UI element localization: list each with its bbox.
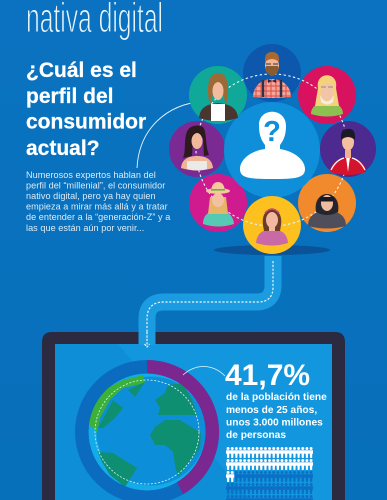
- statistic description: de la población tiene: [226, 392, 327, 403]
- greenland: [128, 382, 145, 397]
- unknown silhouette: [240, 112, 305, 179]
- heading: actual?: [26, 137, 100, 160]
- heading: ¿Cuál es el: [26, 59, 137, 82]
- africa: [150, 420, 201, 477]
- persona: blonde man in green: [311, 75, 343, 116]
- dashed arrow end: [144, 332, 150, 347]
- dashed ring: [196, 74, 348, 226]
- statistic description: de personas: [226, 430, 286, 441]
- monitor: [42, 332, 345, 500]
- question mark: ?: [263, 116, 281, 148]
- screen highlight: [118, 344, 332, 500]
- statistic: 41,7%: 41,7%: [225, 359, 310, 392]
- pipe from persona wheel to monitor: [147, 256, 273, 346]
- intro text block: las que están aún por venir...: [26, 223, 144, 233]
- europe: [155, 383, 197, 415]
- pictogram of people: [226, 447, 313, 500]
- persona: bearded man in plaid shirt: [253, 52, 291, 98]
- yellow disc: [243, 196, 301, 254]
- highlighted people: [226, 447, 313, 483]
- persona: man with long hair in leather jacket: [199, 73, 238, 121]
- pipe end over monitor: [138, 332, 156, 347]
- persona: woman with long dark hair: [181, 126, 213, 170]
- dashed globe ring: [95, 380, 199, 484]
- center disc: [224, 102, 320, 198]
- intro text block: nativo digital, pero ya hay quien: [26, 191, 156, 201]
- intro text block: empieza a mirar más allá y a tratar: [26, 202, 168, 212]
- americas highlight: [88, 375, 145, 433]
- donut base ring: [75, 360, 219, 500]
- south america: [98, 452, 137, 487]
- monitor screen: [55, 344, 332, 500]
- wheel shadow: [214, 245, 330, 255]
- statistic description: menos de 25 años,: [226, 405, 317, 416]
- heading: perfil del: [26, 85, 114, 108]
- intro text block: Numerosos expertos hablan del: [26, 170, 156, 180]
- callout curve: [183, 366, 225, 376]
- statistic description: unos 3.000 millones: [226, 418, 323, 428]
- persona wheel: [169, 44, 376, 255]
- connector curve from text to persona: [137, 101, 205, 168]
- intro text block: de entender a la “generación-Z” y a: [26, 212, 171, 222]
- globe: [88, 374, 206, 490]
- donut chart with globe: [75, 360, 219, 500]
- intro text block: perfil del “millenial”, el consumidor: [26, 180, 165, 190]
- monitor frame: [42, 332, 345, 500]
- persona discs: [169, 44, 376, 232]
- persona: woman in sun hat and floral shirt: [203, 182, 234, 226]
- donut segment 41.7%: [147, 360, 219, 494]
- dashed path: [147, 261, 273, 332]
- heading: consumidor: [26, 110, 146, 134]
- persona: man in red track jacket: [330, 129, 366, 175]
- persona: woman with headband in pink: [256, 209, 288, 246]
- persona: hooded figure with sunglasses: [308, 194, 346, 228]
- north america: [98, 400, 123, 428]
